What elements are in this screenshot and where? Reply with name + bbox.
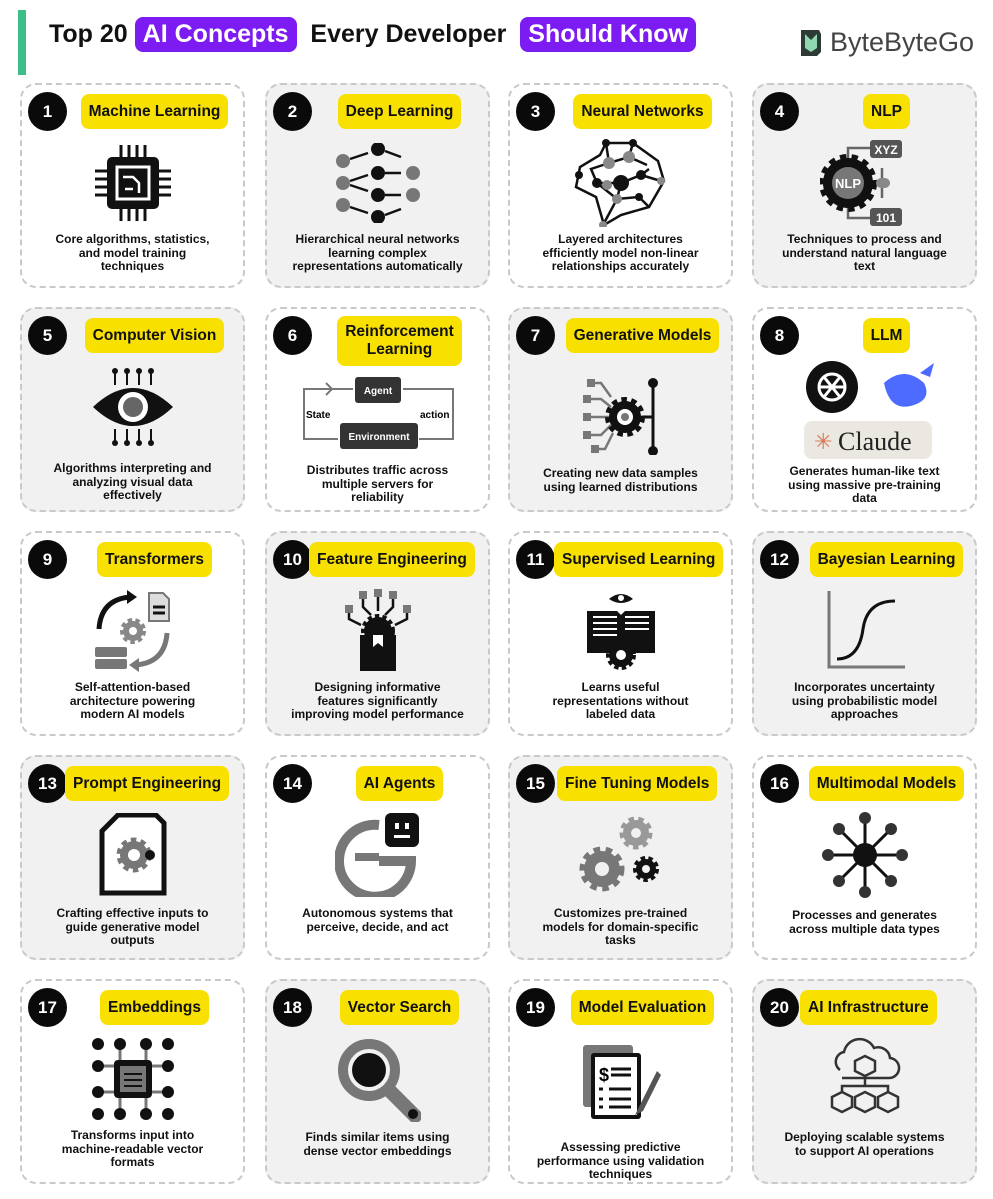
card 2: 2: [288, 102, 297, 120]
card 6: reliability: [351, 490, 404, 504]
card 14: [265, 755, 490, 960]
card 8: using massive pre-training: [788, 478, 941, 492]
card 18: dense vector embeddings: [303, 1144, 452, 1158]
card 6: Reinforcement: [345, 323, 454, 340]
icon: RL loop: Environment: [348, 432, 410, 443]
icon: LLM logos: ✳: [814, 429, 832, 454]
icon: NLP gear: XYZ: [874, 143, 897, 157]
card 13: 13: [38, 774, 57, 792]
card 17: Transforms input into: [71, 1128, 194, 1142]
card 16: [752, 755, 977, 960]
icon: book gear: [587, 594, 655, 670]
card 17: formats: [110, 1155, 154, 1169]
icon: LLM logos: [804, 361, 934, 459]
card 17: machine-readable vector: [62, 1142, 203, 1156]
icon: embedding chip: [92, 1038, 174, 1120]
card 7: Generative Models: [574, 326, 711, 344]
card 12: [752, 531, 977, 736]
card 3: [508, 83, 733, 288]
card 8: LLM: [871, 326, 902, 344]
card 5: 5: [43, 326, 52, 344]
card 8: data: [852, 491, 877, 505]
card 9: 9: [43, 550, 52, 568]
card 4: understand natural language: [782, 246, 947, 260]
card 7: Creating new data samples: [543, 466, 698, 480]
icon: evaluation doc: $: [598, 1065, 609, 1085]
card 2: [265, 83, 490, 288]
icon: gears: [580, 816, 659, 892]
card 9: Transformers: [105, 550, 204, 568]
card 19: Assessing predictive: [560, 1140, 681, 1154]
card 7: 7: [531, 326, 540, 344]
card 18: Vector Search: [348, 998, 451, 1016]
card 7: using learned distributions: [543, 480, 698, 494]
card 2: representations automatically: [292, 259, 463, 273]
icon: magnifier: [338, 1039, 421, 1122]
card 8: 8: [775, 326, 784, 344]
card 1: 1: [43, 102, 52, 120]
logo: ByteByteGo: [830, 26, 974, 56]
card 13: [20, 755, 245, 960]
card 3: Neural Networks: [581, 102, 704, 120]
card 20: 20: [770, 998, 789, 1016]
card 16: Processes and generates: [792, 908, 937, 922]
card 9: modern AI models: [80, 707, 185, 721]
card 16: Multimodal Models: [817, 774, 956, 792]
card 9: Self-attention-based: [75, 680, 190, 694]
card 15: Fine Tuning Models: [565, 774, 709, 792]
card 17: [20, 979, 245, 1184]
icon: neural brain: [574, 139, 666, 227]
card 8: Generates human-like text: [789, 464, 940, 478]
icon: LLM logos: Claude: [838, 427, 912, 456]
card 16: across multiple data types: [789, 922, 940, 936]
icon: agent: [335, 813, 419, 897]
card 9: architecture powering: [70, 694, 195, 708]
card 4: NLP: [871, 102, 902, 120]
card 1: and model training: [79, 246, 186, 260]
card 6: Learning: [367, 341, 432, 358]
card 14: Autonomous systems that: [302, 906, 453, 920]
card 15: models for domain-specific: [542, 920, 699, 934]
card 2: Hierarchical neural networks: [295, 232, 460, 246]
card 6: [265, 307, 490, 512]
card 15: tasks: [605, 933, 636, 947]
card 1: techniques: [101, 259, 164, 273]
card 1: Core algorithms, statistics,: [55, 232, 210, 246]
card 1: Machine Learning: [89, 102, 220, 120]
icon: prompt doc: [100, 813, 166, 896]
icon: NLP gear: [820, 140, 902, 226]
card 10: Feature Engineering: [317, 550, 467, 568]
card 7: [508, 307, 733, 512]
card 4: text: [854, 259, 875, 273]
card 10: Designing informative: [314, 680, 441, 694]
card 12: 12: [770, 550, 789, 568]
card 5: effectively: [103, 488, 162, 502]
icon: RL loop: State: [306, 410, 330, 421]
icon: cloud cubes: [830, 1038, 900, 1114]
card 4: 4: [775, 102, 784, 120]
card 17: Embeddings: [108, 998, 201, 1016]
card 3: relationships accurately: [552, 259, 689, 273]
card 18: [265, 979, 490, 1184]
icon: hub: [822, 812, 908, 898]
icon: sigmoid chart: [828, 591, 905, 668]
title: AI Concepts: [143, 20, 289, 48]
card 13: outputs: [110, 933, 154, 947]
icon: deep network: [336, 143, 420, 223]
card 19: performance using validation: [537, 1154, 704, 1168]
card 11: Supervised Learning: [562, 550, 715, 568]
card 12: Incorporates uncertainty: [794, 680, 935, 694]
card 11: Learns useful: [581, 680, 660, 694]
card 16: 16: [770, 774, 789, 792]
icon: evaluation doc: [583, 1045, 661, 1119]
card 11: representations without: [552, 694, 688, 708]
card 18: Finds similar items using: [305, 1130, 450, 1144]
card 5: [20, 307, 245, 512]
card 19: techniques: [589, 1167, 652, 1181]
card 1: [20, 83, 245, 288]
card 13: Crafting effective inputs to: [56, 906, 208, 920]
icon: RL loop: [303, 377, 454, 449]
card 10: [265, 531, 490, 736]
card 5: Computer Vision: [93, 326, 216, 344]
card 5: analyzing visual data: [72, 474, 193, 488]
icon: chip: [95, 145, 171, 221]
card 4: Techniques to process and: [787, 232, 942, 246]
card 20: to support AI operations: [795, 1144, 934, 1158]
card 12: approaches: [831, 707, 898, 721]
title: Top 20 Every Developer: [49, 20, 506, 48]
card 3: efficiently model non-linear: [542, 246, 699, 260]
card 19: [508, 979, 733, 1184]
icon: transformer: [95, 590, 170, 672]
card 8: [752, 307, 977, 512]
card 4: [752, 83, 977, 288]
card 3: Layered architectures: [558, 232, 683, 246]
card 15: Customizes pre-trained: [554, 906, 687, 920]
card 17: 17: [38, 998, 57, 1016]
card 14: AI Agents: [364, 774, 435, 792]
icon: NLP gear: NLP: [834, 176, 861, 191]
card 11: 11: [526, 550, 544, 568]
card 9: [20, 531, 245, 736]
card 6: Distributes traffic across: [307, 463, 448, 477]
card 2: Deep Learning: [346, 102, 453, 120]
accent bar: [18, 10, 26, 75]
icon: feature: [345, 589, 411, 671]
icon: RL loop: Agent: [363, 386, 392, 397]
card 20: Deploying scalable systems: [784, 1130, 945, 1144]
card 6: multiple servers for: [322, 476, 433, 490]
card 19: Model Evaluation: [579, 998, 706, 1016]
title: Should Know: [528, 20, 688, 48]
card 14: perceive, decide, and act: [306, 920, 449, 934]
card 12: using probabilistic model: [792, 694, 937, 708]
card 2: learning complex: [328, 246, 427, 260]
card 18: 18: [283, 998, 302, 1016]
card 3: 3: [531, 102, 540, 120]
card 19: 19: [526, 998, 545, 1016]
card 12: Bayesian Learning: [818, 550, 955, 568]
card 10: 10: [283, 550, 302, 568]
icon: eye: [93, 368, 173, 446]
card 13: Prompt Engineering: [73, 774, 221, 792]
title: [49, 17, 696, 52]
card 10: improving model performance: [291, 707, 464, 721]
card 13: guide generative model: [65, 920, 200, 934]
card 20: AI Infrastructure: [808, 998, 929, 1016]
card 14: 14: [283, 774, 302, 792]
card 11: [508, 531, 733, 736]
card 11: labeled data: [586, 707, 655, 721]
icon: generative gear: [583, 378, 658, 455]
card 15: [508, 755, 733, 960]
card 6: 6: [288, 326, 297, 344]
card 5: Algorithms interpreting and: [53, 461, 212, 475]
icon: RL loop: action: [420, 410, 449, 421]
card 15: 15: [526, 774, 545, 792]
card 20: [752, 979, 977, 1184]
card 10: features significantly: [317, 694, 438, 708]
icon: NLP gear: 101: [875, 211, 896, 225]
